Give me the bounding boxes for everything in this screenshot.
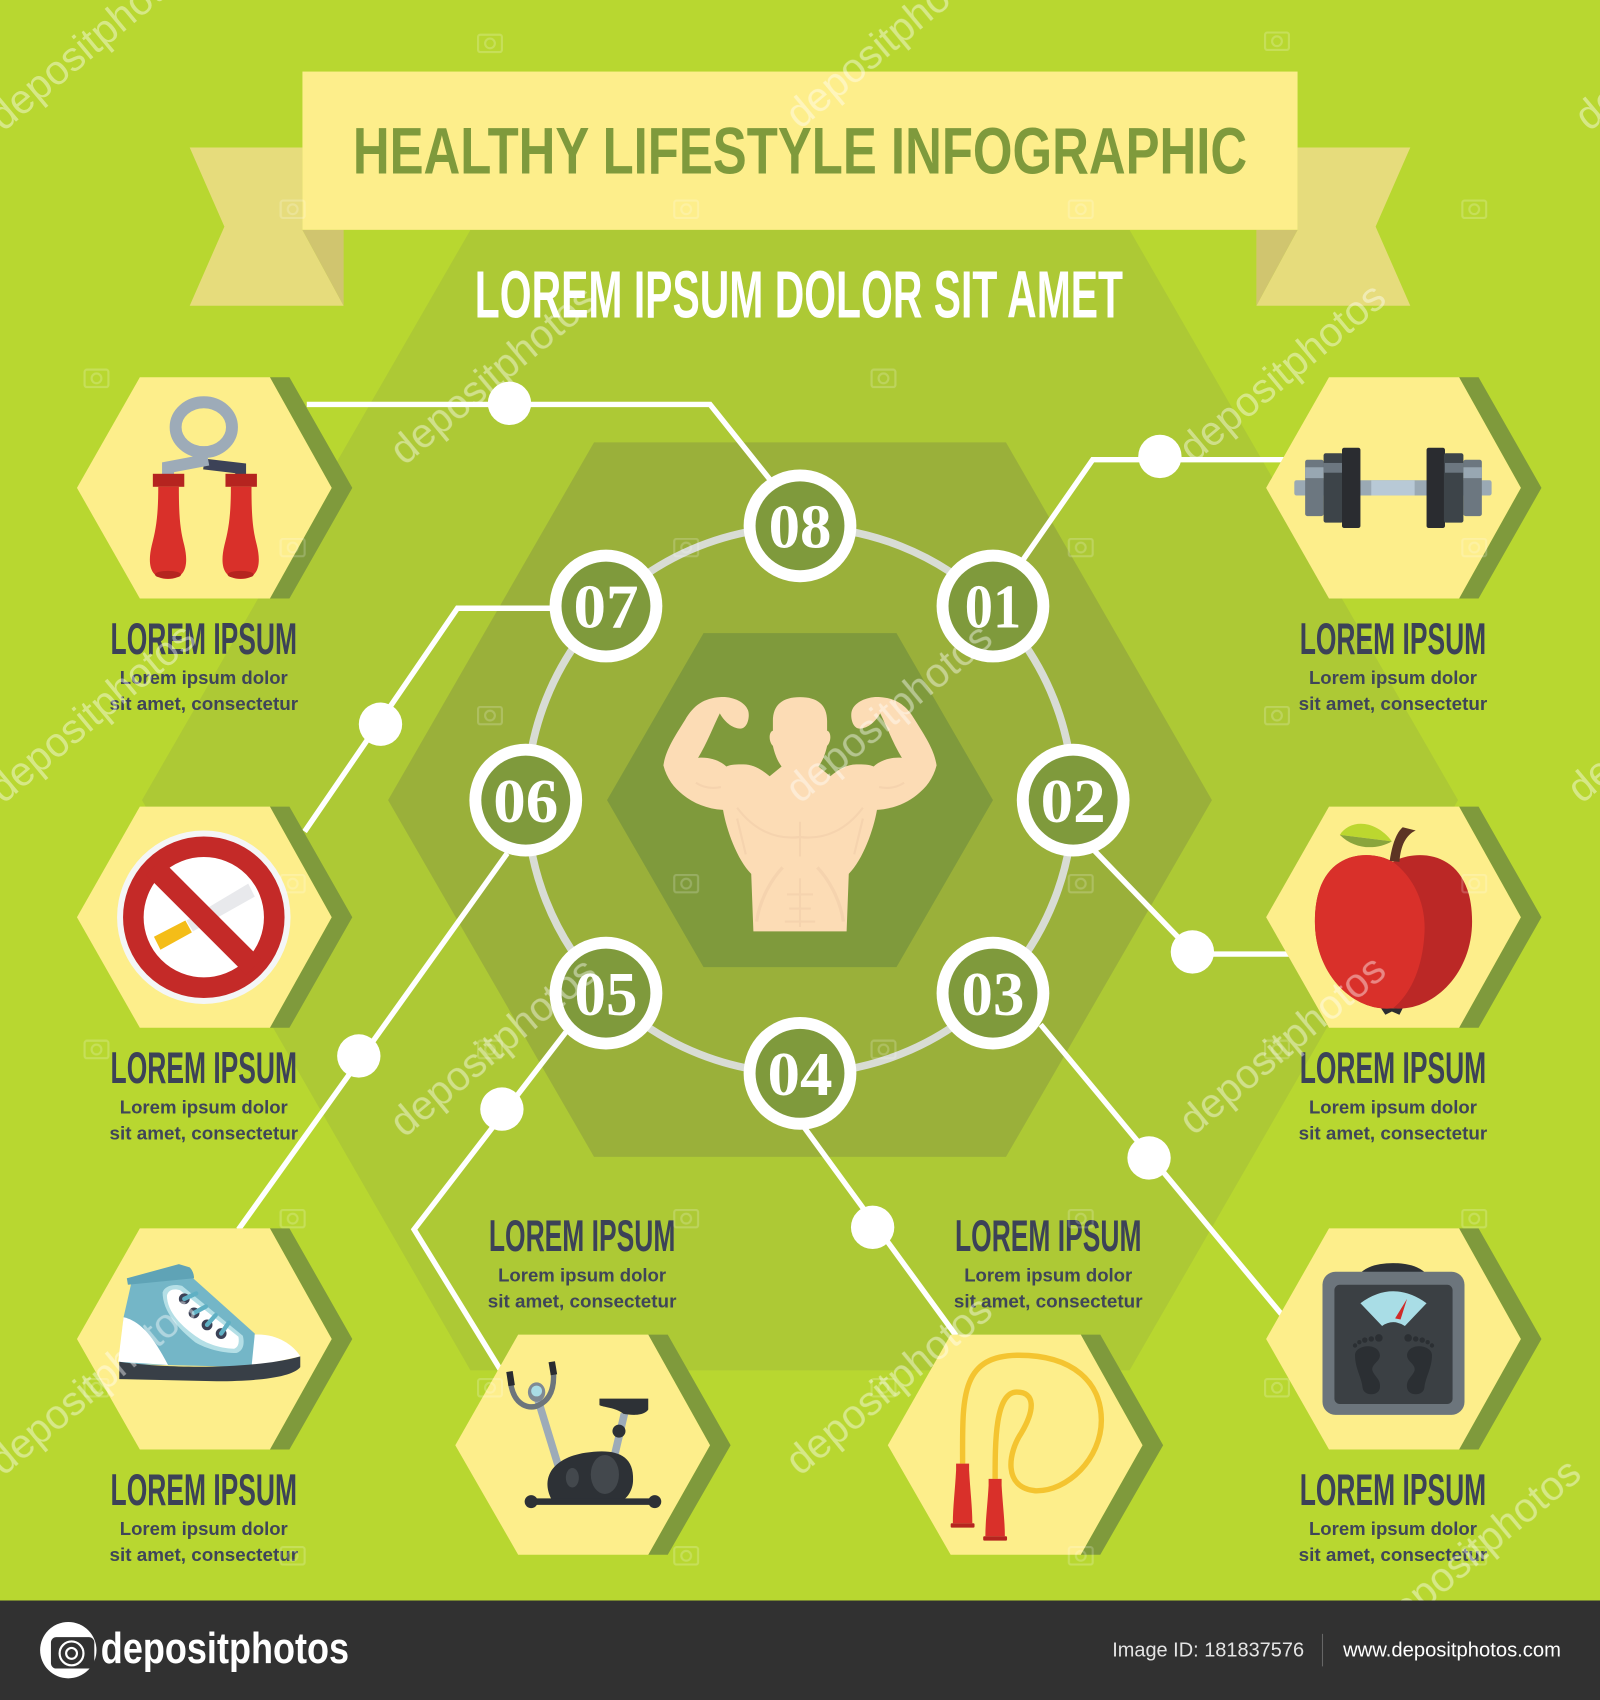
node 06 [469,744,582,857]
label: gripper: sit amet, consectetur [109,693,298,714]
node 08: 08 [769,492,831,562]
icon: jump rope [951,1355,1101,1541]
node 06: 06 [493,766,558,836]
node 04 [744,1017,856,1130]
node 02: 02 [1041,766,1106,836]
connector lines [238,404,1292,1370]
label: jump rope: Lorem ipsum dolor [964,1265,1132,1286]
label: gripper: LOREM IPSUM [111,615,297,664]
label: no smoking: Lorem ipsum dolor [120,1096,288,1117]
label: scale [1299,1466,1487,1565]
label: apple: sit amet, consectetur [1299,1122,1487,1143]
node 04: 04 [767,1039,833,1109]
node 01 [937,550,1049,662]
label: dumbbell [1299,615,1487,714]
subtitle: LOREM IPSUM DOLOR SIT AMET [475,258,1123,333]
label: exercise bike: LOREM IPSUM [489,1212,675,1261]
node 05: 05 [575,959,637,1029]
icon: apple [1315,824,1472,1015]
label: shoe: sit amet, consectetur [109,1544,298,1565]
title ribbon [190,72,1410,306]
watermark text: depositphotos [776,614,1001,811]
icon: hand gripper [150,402,259,579]
watermark text: depositphotos [381,948,605,1145]
label: dumbbell: sit amet, consectetur [1299,693,1487,714]
hexagon: scale [1266,1228,1541,1450]
node 03: 03 [962,959,1024,1029]
node 03 [937,937,1049,1049]
label: jump rope: LOREM IPSUM [955,1212,1141,1261]
label: apple [1299,1044,1487,1143]
footer url: www.depositphotos.com [1342,1640,1561,1662]
icon: muscular body [663,697,937,931]
hexagon: jump rope [888,1335,1163,1555]
label: jump rope: sit amet, consectetur [954,1291,1143,1312]
label: gripper [109,615,298,714]
inner background hexagon [607,633,993,967]
label: no smoking [109,1044,298,1143]
watermark text: depositphotos [1365,1448,1589,1646]
label: jump rope [954,1212,1143,1312]
watermark text: depositphotos [776,1286,1001,1484]
label: no smoking: sit amet, consectetur [109,1122,298,1143]
label: dumbbell: Lorem ipsum dolor [1309,667,1477,688]
node 07: 07 [573,572,638,642]
node 05 [550,937,662,1049]
hexagon: gripper [77,377,352,598]
label: exercise bike [488,1212,676,1312]
icon: no smoking sign [117,830,291,1004]
icon: exercise bike [509,1362,661,1508]
watermark cameras [85,33,1486,1564]
label: shoe: Lorem ipsum dolor [120,1518,288,1539]
node 01: 01 [965,572,1021,642]
hexagon: dumbbell [1266,377,1541,598]
footer image id: Image ID: 181837576 [1112,1640,1304,1662]
node 08 [744,469,856,582]
footer logo: depositphotos [101,1625,349,1673]
icon: bathroom scale [1322,1263,1464,1415]
icon: sneaker [118,1264,300,1381]
connector dots [337,382,1214,1249]
outer background hexagon [142,230,1458,1370]
hexagon: exercise bike [455,1335,731,1555]
label: no smoking: LOREM IPSUM [111,1044,297,1093]
footer bar [0,1600,1600,1700]
watermark text: depositphotos [381,275,605,473]
hexagon: shoe [77,1228,352,1450]
node 07 [550,550,662,662]
watermark text: depositphotos [1170,273,1394,471]
node 02 [1017,744,1130,857]
central ring [527,527,1073,1073]
middle background hexagon [388,442,1212,1157]
label: shoe [109,1466,298,1565]
label: apple: Lorem ipsum dolor [1309,1096,1477,1117]
label: gripper: Lorem ipsum dolor [120,667,288,688]
watermark text: depositphotos [1170,945,1394,1143]
label: exercise bike: Lorem ipsum dolor [498,1265,666,1286]
label: shoe: LOREM IPSUM [111,1466,297,1515]
title: HEALTHY LIFESTYLE INFOGRAPHIC [353,114,1247,188]
label: scale: Lorem ipsum dolor [1309,1518,1477,1539]
hexagon: no smoking [77,807,352,1028]
label: scale: sit amet, consectetur [1299,1544,1487,1565]
hexagon: apple [1266,807,1541,1028]
footer logo [40,1622,349,1678]
icon: dumbbell [1294,448,1492,528]
label: exercise bike: sit amet, consectetur [488,1291,676,1312]
